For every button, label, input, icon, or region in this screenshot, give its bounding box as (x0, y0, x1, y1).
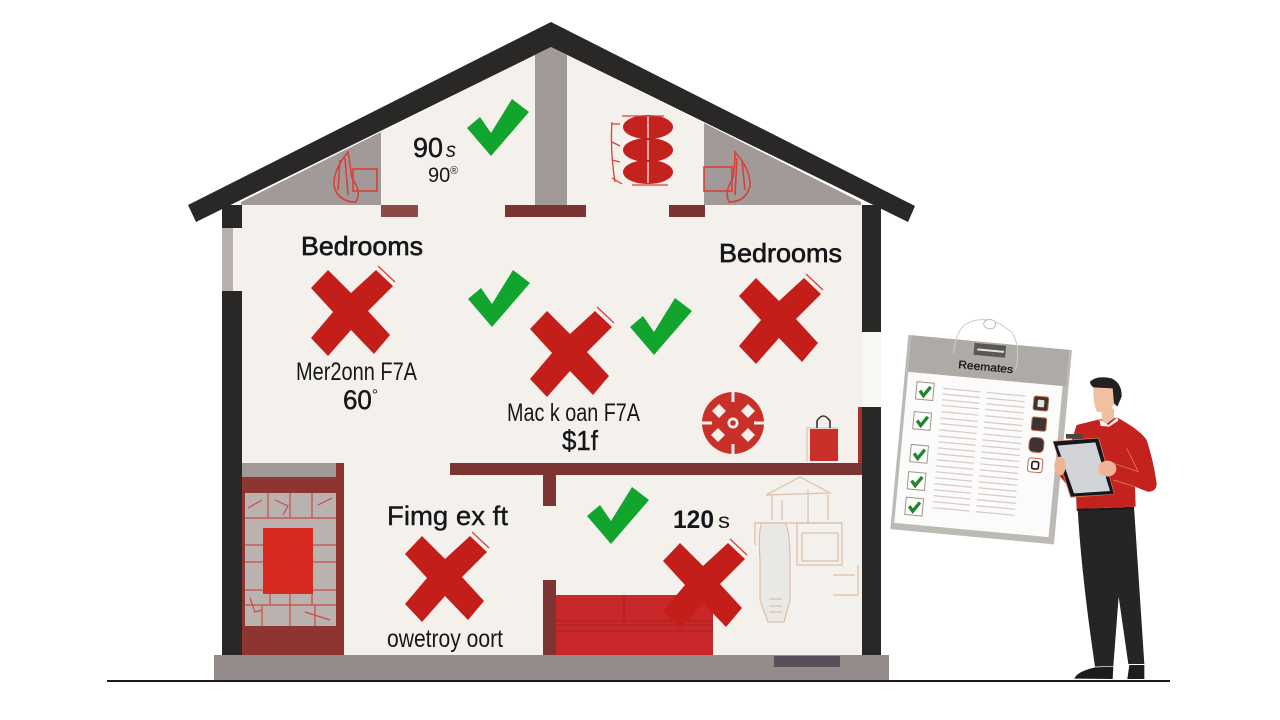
sofa (556, 595, 713, 655)
room text centre: Mac k oan F7A (507, 399, 640, 427)
ground line (107, 680, 1170, 682)
attic left gray (241, 132, 381, 205)
brick lines (245, 493, 336, 626)
check: centre right (630, 298, 692, 355)
room value left: ° (372, 387, 378, 404)
boiler vents (769, 599, 782, 612)
attic label 90s: 90s (413, 132, 456, 163)
icon: red padlock bag (807, 416, 838, 461)
right status icons (1027, 396, 1049, 473)
clip (973, 343, 1006, 358)
fireplace (242, 463, 344, 655)
left wall (222, 205, 242, 655)
attic label 90: ® (450, 165, 458, 177)
interior walls (450, 407, 862, 655)
disc cutouts (702, 392, 764, 454)
neck (1102, 408, 1114, 425)
foundation vent (774, 656, 840, 667)
house interior (235, 47, 867, 655)
hair (1090, 377, 1122, 407)
attic label 90: 90 (428, 164, 451, 187)
clipboard sheet (1057, 442, 1110, 493)
board header (908, 335, 1069, 386)
attic center column (535, 47, 567, 205)
cross: lower left (405, 532, 489, 622)
roof (188, 22, 915, 222)
house structure (188, 22, 915, 680)
label: 120s (673, 506, 730, 534)
disc stack (623, 115, 673, 184)
sofa body (556, 595, 713, 655)
icon: boiler sketch (755, 477, 858, 622)
face (1093, 387, 1114, 412)
clip ring knot (983, 319, 996, 329)
fire opening (263, 528, 313, 594)
disc centre marks (647, 116, 649, 183)
sofa lines (556, 595, 713, 631)
label unit: s (718, 510, 730, 533)
sketch outline (611, 116, 668, 185)
person (1053, 377, 1157, 679)
foundation (214, 655, 889, 680)
padlock shackle (817, 416, 830, 428)
clip ring (952, 317, 1021, 370)
icon: red target disc (702, 392, 764, 454)
check boxes (905, 382, 934, 516)
boiler window (802, 533, 838, 561)
shoe right (1127, 665, 1144, 679)
clipboard clip (1066, 434, 1083, 439)
sweater arm lines (1113, 448, 1138, 487)
inspector and checklist (890, 312, 1157, 679)
brick panel (245, 493, 336, 626)
icon: left attic horn (334, 152, 377, 202)
clipboard outline (1053, 438, 1115, 498)
hand left (1054, 457, 1066, 475)
check: lower (587, 487, 649, 544)
status icon centres (1032, 400, 1045, 469)
disc centre (730, 420, 736, 426)
trousers (1078, 507, 1144, 667)
small house roof (766, 477, 830, 523)
heading: bedrooms left: Bedrooms (301, 231, 423, 261)
list lines (932, 388, 1026, 515)
icon: right attic horn (704, 152, 750, 202)
check: attic (467, 99, 529, 156)
boiler body (759, 523, 790, 622)
brick surround dark red (242, 463, 344, 655)
checklist title: Reemates (958, 359, 1014, 376)
right wall opening (862, 332, 881, 407)
shoe left (1074, 667, 1113, 679)
attic right gray (704, 123, 861, 205)
attic beams (381, 205, 705, 217)
room text left: Mer2onn F7A (296, 358, 417, 386)
boiler outer frame (755, 523, 842, 545)
handheld clipboard (1053, 438, 1114, 497)
side box (833, 565, 858, 595)
check: centre left (468, 270, 530, 327)
checklist board (890, 312, 1074, 544)
cross: centre (530, 307, 614, 397)
label digits: 120 (673, 506, 714, 534)
collar (1099, 417, 1118, 427)
belt (1077, 507, 1134, 511)
right wall (862, 205, 881, 655)
body outline (807, 428, 838, 461)
cross: right bedroom (739, 274, 823, 364)
room value left: 60 (343, 385, 373, 415)
icon: stacked red discs (611, 115, 673, 185)
mantel gray (242, 463, 336, 477)
disc (702, 392, 764, 454)
hand right (1098, 461, 1116, 477)
cross: sofa (663, 539, 747, 629)
board frame (890, 335, 1072, 544)
heading: bedrooms right: Bedrooms (719, 238, 842, 268)
boiler box (797, 523, 842, 565)
room value centre: $1f (562, 425, 598, 456)
interior strip by left wall (233, 228, 242, 291)
clip shine (977, 348, 1004, 353)
cross: left bedroom (311, 266, 395, 356)
paper (894, 372, 1063, 537)
padlock body (810, 429, 838, 461)
sweater (1060, 418, 1157, 509)
box checks (909, 386, 931, 512)
label: lower left: owetroy oort (387, 625, 503, 653)
label: fireplace room: Fimg ex ft (387, 501, 508, 531)
